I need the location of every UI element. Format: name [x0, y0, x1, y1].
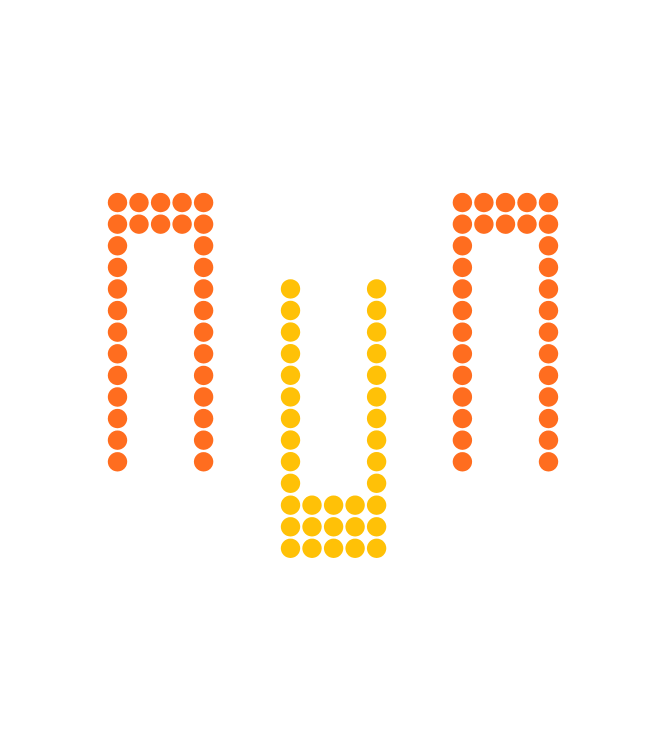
middle yellow cup of dots	[281, 279, 386, 558]
left orange arch of dots	[108, 193, 213, 471]
right orange arch of dots	[453, 193, 558, 471]
